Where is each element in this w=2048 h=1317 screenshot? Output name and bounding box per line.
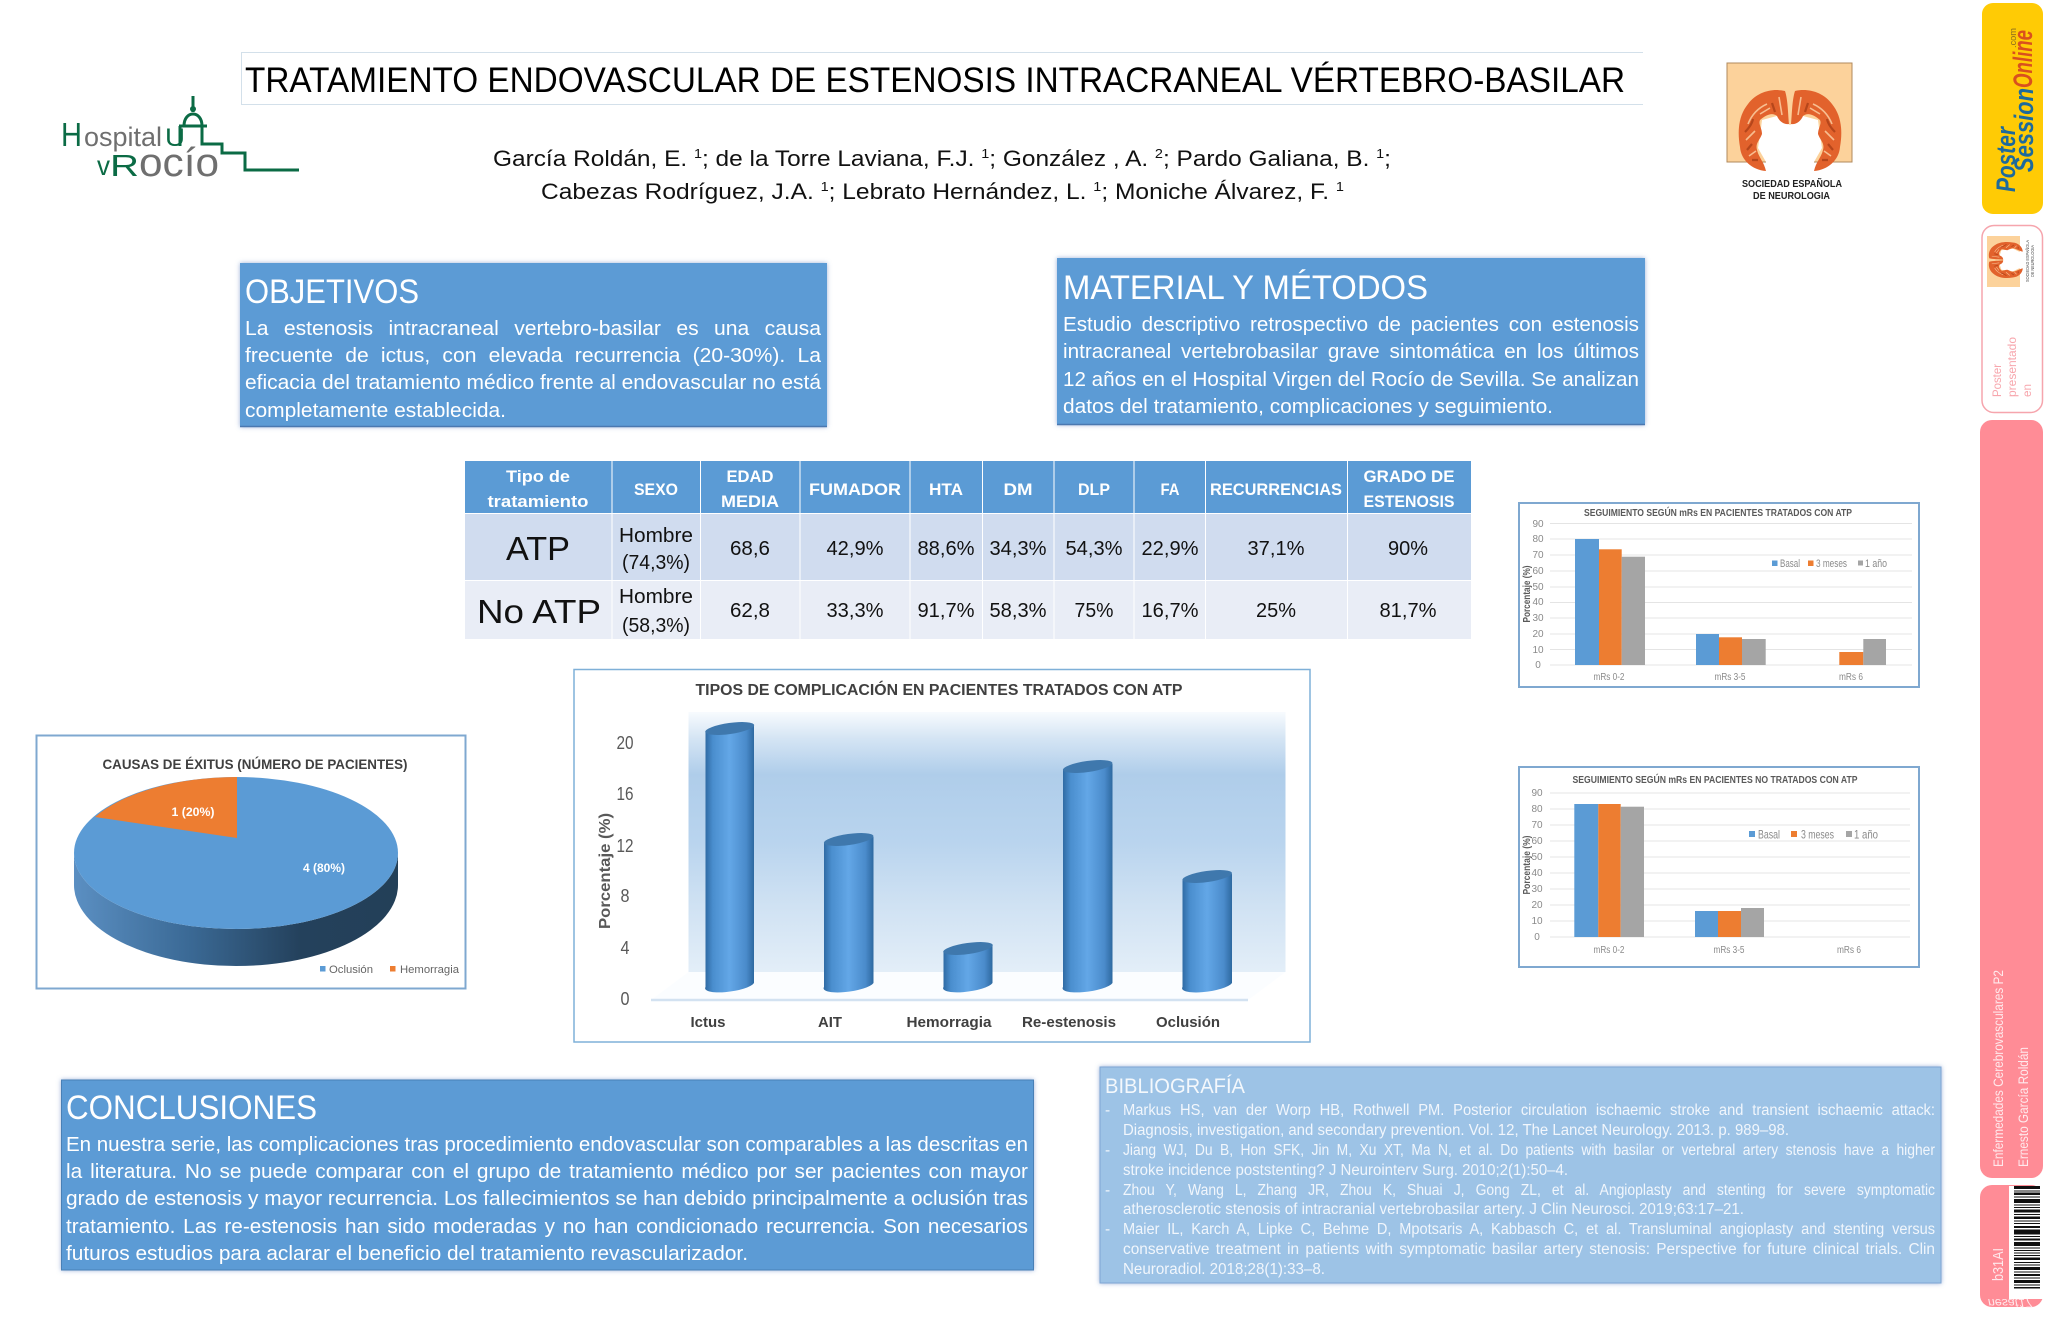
panel: conclusiones: [62, 1080, 1034, 1270]
chart: seguimiento mRs no tratados con ATP: 20: [1531, 900, 1543, 911]
table: características por tipo de tratamiento: No ATP: [477, 593, 601, 630]
sidebar: código y barcode: b31AI: [1990, 1248, 2007, 1281]
bar: Oclusión: [1182, 868, 1233, 992]
logo: Sociedad Española de Neurología: DE NEUROLOGIA: [1753, 190, 1830, 202]
reference 2: Jiang WJ, Du B, Hon SFK, Jin M, Xu XT, Ma N, et al. Do patients with basilar or vertebral artery stenosis have a higher: [1123, 1142, 1935, 1159]
table: características por tipo de tratamiento: 81,7%: [1380, 600, 1437, 622]
chart: tipos de complicación (cylinders): 16: [616, 784, 634, 804]
table: características por tipo de tratamiento: DM: [1004, 481, 1032, 499]
sidebar: Poster Session Online badge: [1982, 3, 2043, 214]
chart: seguimiento mRs tratados con ATP: mRs 0-2: [1594, 672, 1625, 683]
chart: seguimiento mRs tratados con ATP: 40: [1532, 597, 1544, 608]
logo: Hospital Universitario Virgen del Rocío: R: [110, 148, 139, 183]
authors: 1: [1336, 179, 1344, 194]
chart: seguimiento mRs tratados con ATP: Porcentaje (%): [1522, 566, 1533, 622]
table: características por tipo de tratamiento: [465, 461, 1471, 639]
chart: seguimiento mRs tratados con ATP: mRs 3-5: [1714, 672, 1746, 683]
table: características por tipo de tratamiento: 91,7%: [918, 600, 975, 622]
chart: seguimiento mRs no tratados con ATP: 80: [1531, 804, 1543, 815]
table: características por tipo de tratamiento: 25%: [1256, 600, 1296, 622]
chart: seguimiento mRs tratados con ATP: 10: [1532, 645, 1544, 656]
table: características por tipo de tratamiento: 34,3%: [990, 538, 1047, 560]
table: características por tipo de tratamiento: MEDIA: [721, 493, 779, 511]
authors: 1: [981, 146, 989, 161]
sidebar: Poster Session Online badge: Online: [2008, 30, 2038, 88]
chart: causas de éxitus (pie): [36, 736, 466, 988]
table: características por tipo de tratamiento: SEXO: [634, 481, 678, 499]
authors: 1: [694, 146, 702, 161]
chart: tipos de complicación (cylinders): 8: [620, 886, 630, 906]
table: características por tipo de tratamiento: HTA: [929, 481, 963, 499]
table: características por tipo de tratamiento: ATP: [506, 530, 570, 567]
chart: seguimiento mRs no tratados con ATP: 10: [1531, 916, 1543, 927]
chart: seguimiento mRs tratados con ATP: [1519, 503, 1919, 687]
chart: seguimiento mRs no tratados con ATP: mRs 0-2: [1594, 945, 1625, 956]
chart: tipos de complicación (cylinders): Hemorragia: [906, 1014, 992, 1031]
chart: seguimiento mRs no tratados con ATP: 70: [1531, 820, 1543, 831]
logo: Hospital Universitario Virgen del Rocío: ospital: [84, 122, 162, 152]
authors: García Roldán, E.: [493, 146, 668, 171]
bar: Ictus: [704, 720, 755, 992]
table: características por tipo de tratamiento: 58,3%: [990, 600, 1047, 622]
chart: seguimiento mRs tratados con ATP: Basal: [1780, 558, 1800, 570]
chart: tipos de complicación (cylinders): 20: [616, 733, 634, 753]
authors: [493, 146, 1391, 204]
chart: seguimiento mRs no tratados con ATP: Basal: [1758, 828, 1780, 842]
chart: causas de éxitus (pie): Oclusión: [329, 964, 373, 976]
table: características por tipo de tratamiento: EDAD: [726, 468, 774, 486]
sidebar: código y barcode: [1980, 1185, 2043, 1310]
chart: causas de éxitus (pie): 4 (80%): [303, 861, 345, 875]
table: características por tipo de tratamiento: Hombre: [619, 525, 693, 547]
table: características por tipo de tratamiento: 37,1%: [1248, 538, 1305, 560]
table: características por tipo de tratamiento: RECURRENCIAS: [1210, 481, 1342, 499]
reference 1: -: [1105, 1102, 1110, 1119]
sidebar: poster presentado en: [1982, 226, 2042, 412]
barcode: [2014, 1186, 2040, 1288]
authors: ;: [1384, 146, 1391, 171]
chart: seguimiento mRs tratados con ATP: 70: [1532, 550, 1544, 561]
chart: seguimiento mRs tratados con ATP: 1 año: [1865, 558, 1887, 570]
table: características por tipo de tratamiento: 90%: [1388, 538, 1428, 560]
table: características por tipo de tratamiento: 62,8: [730, 600, 770, 622]
chart: seguimiento mRs no tratados con ATP: 0: [1534, 932, 1540, 943]
authors: ; Moniche Álvarez, F.: [1101, 179, 1336, 204]
chart: causas de éxitus (pie): 1 (20%): [172, 805, 214, 819]
chart: seguimiento mRs no tratados con ATP: 1 año: [1854, 828, 1878, 842]
authors: ; Pardo Galiana, B.: [1163, 146, 1376, 171]
table: características por tipo de tratamiento: 54,3%: [1066, 538, 1123, 560]
panel: bibliografía: [1100, 1067, 1941, 1283]
panel: objetivos: eficacia del tratamiento médico frente al endovascular no está: [245, 372, 822, 394]
chart: seguimiento mRs tratados con ATP: 60: [1532, 566, 1544, 577]
table: características por tipo de tratamiento: 88,6%: [918, 538, 975, 560]
chart: tipos de complicación (cylinders): Oclusión: [1156, 1014, 1220, 1031]
table: características por tipo de tratamiento: GRADO DE: [1364, 468, 1454, 486]
authors: 1: [1376, 146, 1384, 161]
sidebar: categoría y autor: [1980, 420, 2043, 1178]
panel: conclusiones: la literatura. No se puede comparar con el grupo de tratamiento médico por ser pacientes con mayor: [66, 1161, 1028, 1183]
sidebar: poster presentado en: SOCIEDAD ESPAÑOLA: [2024, 240, 2030, 282]
sidebar: poster presentado en: en: [2020, 384, 2034, 397]
chart: seguimiento mRs tratados con ATP: 20: [1532, 629, 1544, 640]
sidebar: Poster Session Online badge: .com: [2008, 28, 2018, 48]
chart: tipos de complicación (cylinders): [574, 670, 1310, 1042]
chart: seguimiento mRs tratados con ATP: 0: [1535, 660, 1541, 671]
reference 2: stroke incidence poststenting? J Neurointerv Surg. 2010;2(1):50–4.: [1123, 1162, 1568, 1179]
chart: causas de éxitus (pie): CAUSAS DE ÉXITUS (NÚMERO DE PACIENTES): [102, 755, 408, 772]
chart: seguimiento mRs no tratados con ATP: 30: [1531, 884, 1543, 895]
chart: tipos de complicación (cylinders): AIT: [818, 1014, 842, 1031]
logo: Sociedad Española de Neurología: [1727, 63, 1852, 202]
reference 4: [1105, 1221, 1935, 1278]
reference 1: [1105, 1102, 1935, 1139]
chart: seguimiento mRs no tratados con ATP: mRs 6: [1837, 945, 1861, 956]
logo: Sociedad Española de Neurología: SOCIEDAD ESPAÑOLA: [1742, 177, 1842, 190]
reference 3: [1105, 1182, 1935, 1218]
logo: Hospital Universitario Virgen del Rocío: ocío: [139, 141, 219, 185]
panel: objetivos: OBJETIVOS: [245, 273, 419, 311]
table: características por tipo de tratamiento: ESTENOSIS: [1364, 493, 1454, 511]
logo: Hospital Universitario Virgen del Rocío: v: [97, 150, 110, 181]
chart: seguimiento mRs no tratados con ATP: 3 meses: [1801, 828, 1834, 842]
reference 1: Markus HS, van der Worp HB, Rothwell PM. Posterior circulation ischaemic stroke and transient ischaemic attack:: [1123, 1102, 1935, 1119]
reference 3: Zhou Y, Wang L, Zhang JR, Zhou K, Shuai J, Gong ZL, et al. Angioplasty and stenting for severe symptomatic: [1123, 1182, 1935, 1199]
table: características por tipo de tratamiento: tratamiento: [488, 493, 588, 511]
authors: Cabezas Rodríguez, J.A.: [541, 179, 786, 204]
chart: tipos de complicación (cylinders): 12: [616, 836, 634, 856]
chart: seguimiento mRs no tratados con ATP: SEGUIMIENTO SEGÚN mRs EN PACIENTES NO TRATADOS CON ATP: [1572, 773, 1858, 786]
reference 2: -: [1105, 1142, 1110, 1159]
table: características por tipo de tratamiento: FUMADOR: [809, 481, 901, 499]
panel: objetivos: completamente establecida.: [245, 400, 506, 422]
chart: seguimiento mRs no tratados con ATP: 50: [1531, 852, 1543, 863]
chart: tipos de complicación (cylinders): TIPOS DE COMPLICACIÓN EN PACIENTES TRATADOS CON ATP: [696, 680, 1183, 699]
chart: seguimiento mRs no tratados con ATP: 40: [1531, 868, 1543, 879]
chart: tipos de complicación (cylinders): Porcentaje (%): [597, 813, 614, 929]
panel: conclusiones: En nuestra serie, las complicaciones tras procedimiento endovascular son comparables a las descritas en: [66, 1134, 1028, 1156]
chart: tipos de complicación (cylinders): Re-estenosis: [1022, 1014, 1116, 1031]
table: características por tipo de tratamiento: (74,3%): [622, 552, 690, 574]
panel: conclusiones: grado de estenosis y mayor recurrencia. Los fallecimientos se han debido principalmente a oclusión tras: [66, 1188, 1028, 1210]
chart: tipos de complicación (cylinders): 4: [620, 938, 630, 958]
table: características por tipo de tratamiento: Hombre: [619, 586, 693, 608]
panel: material y métodos: [1057, 258, 1645, 425]
reference 3: atherosclerotic stenosis of intracranial vertebrobasilar artery. J Clin Neurosci. 2019;63:17–21.: [1123, 1201, 1744, 1218]
authors: ; Lebrato Hernández, L.: [829, 179, 1093, 204]
panel: material y métodos: datos del tratamiento, complicaciones y seguimiento.: [1063, 396, 1553, 418]
bar: AIT: [823, 831, 874, 992]
reference 4: Maier IL, Karch A, Lipke C, Behme D, Mpotsaris A, Kabbasch C, et al. Transluminal angioplasty and stenting versus: [1123, 1221, 1935, 1238]
chart: tipos de complicación (cylinders): Ictus: [690, 1014, 726, 1031]
panel: material y métodos: intracraneal vertebrobasilar grave sintomática en los últimos: [1063, 341, 1639, 363]
panel: bibliografía: BIBLIOGRAFÍA: [1105, 1075, 1245, 1098]
authors: 1: [821, 179, 829, 194]
panel: conclusiones: tratamiento. Las re-estenosis han sido moderadas y no han condicionado recurrencia. Son necesarios: [66, 1216, 1028, 1238]
logo: Hospital Universitario Virgen del Rocío: H: [61, 116, 82, 153]
chart: seguimiento mRs tratados con ATP: 50: [1532, 582, 1544, 593]
logo: Hospital Universitario Virgen del Rocío: [61, 96, 299, 185]
authors: 1: [1093, 179, 1101, 194]
panel: material y métodos: Estudio descriptivo retrospectivo de pacientes con estenosis: [1063, 314, 1639, 336]
table: características por tipo de tratamiento: 42,9%: [826, 538, 884, 560]
panel: objetivos: [240, 263, 827, 427]
reference 4: -: [1105, 1221, 1110, 1238]
table: características por tipo de tratamiento: Tipo de: [506, 468, 570, 486]
panel: material y métodos: 12 años en el Hospital Virgen del Rocío de Sevilla. Se analizan: [1063, 369, 1639, 391]
sidebar: categoría y autor: Ernesto García Roldán: [2016, 1047, 2031, 1167]
chart: seguimiento mRs no tratados con ATP: 60: [1531, 836, 1543, 847]
reference 4: conservative treatment in patients with symptomatic basilar artery stenosis: Perspective for future clinical trials. Clin: [1123, 1241, 1935, 1258]
chart: seguimiento mRs tratados con ATP: 30: [1532, 613, 1544, 624]
logo: Hospital Universitario Virgen del Rocío: U: [165, 124, 185, 152]
sidebar: poster presentado en: Poster: [1990, 364, 2004, 397]
sidebar: categoría y autor: Enfermedades Cerebrovasculares P2: [1991, 970, 2006, 1167]
panel: conclusiones: futuros estudios para aclarar el beneficio del tratamiento revascularizador.: [66, 1243, 748, 1265]
chart: seguimiento mRs no tratados con ATP: [1519, 767, 1919, 967]
sidebar: poster presentado en: presentado: [2005, 337, 2019, 397]
reference 3: -: [1105, 1182, 1110, 1199]
chart: seguimiento mRs tratados con ATP: 80: [1532, 534, 1544, 545]
bar: Re-estenosis: [1062, 758, 1113, 992]
table: características por tipo de tratamiento: DLP: [1078, 481, 1110, 499]
authors: 2: [1155, 146, 1163, 161]
panel: objetivos: frecuente de ictus, con elevada recurrencia (20-30%). La: [245, 345, 822, 367]
sidebar: poster presentado en: DE NEUROLOGIA: [2030, 245, 2035, 277]
table: características por tipo de tratamiento: 16,7%: [1142, 600, 1199, 622]
chart: seguimiento mRs tratados con ATP: 3 meses: [1816, 558, 1847, 570]
reference 4: Neuroradiol. 2018;28(1):33–8.: [1123, 1261, 1325, 1278]
title: TRATAMIENTO ENDOVASCULAR DE ESTENOSIS INTRACRANEAL VÉRTEBRO-BASILAR: [245, 61, 1625, 100]
panel: conclusiones: CONCLUSIONES: [66, 1089, 317, 1127]
bar: Hemorragia: [942, 940, 994, 992]
reference 2: [1105, 1142, 1935, 1179]
chart: seguimiento mRs tratados con ATP: mRs 6: [1839, 672, 1863, 683]
sidebar: Poster Session Online badge: Poster: [1991, 126, 2021, 192]
chart: seguimiento mRs tratados con ATP: SEGUIMIENTO SEGÚN mRs EN PACIENTES TRATADOS CON ATP: [1584, 506, 1852, 519]
chart: seguimiento mRs no tratados con ATP: Porcentaje (%): [1522, 836, 1533, 894]
chart: tipos de complicación (cylinders): 0: [620, 989, 630, 1009]
panel: material y métodos: MATERIAL Y MÉTODOS: [1063, 269, 1428, 307]
table: características por tipo de tratamiento: 75%: [1074, 600, 1114, 622]
table: características por tipo de tratamiento: 22,9%: [1142, 538, 1199, 560]
chart: seguimiento mRs tratados con ATP: 90: [1532, 519, 1544, 530]
sidebar: Poster Session Online badge: Session: [2009, 88, 2039, 172]
table: características por tipo de tratamiento: (58,3%): [622, 615, 690, 637]
reference 1: Diagnosis, investigation, and secondary prevention. Vol. 12, The Lancet Neurology. 2013. p. 989–98.: [1123, 1122, 1789, 1139]
chart: seguimiento mRs no tratados con ATP: 90: [1531, 788, 1543, 799]
authors: ; González , A.: [989, 146, 1155, 171]
table: características por tipo de tratamiento: 68,6: [730, 538, 770, 560]
table: características por tipo de tratamiento: 33,3%: [826, 600, 884, 622]
chart: seguimiento mRs no tratados con ATP: mRs 3-5: [1714, 945, 1745, 956]
authors: ; de la Torre Laviana, F.J.: [702, 146, 981, 171]
sidebar: código y barcode: nesat17: [1988, 1296, 2033, 1310]
table: características por tipo de tratamiento: FA: [1160, 481, 1180, 499]
panel: objetivos: La estenosis intracraneal vertebro-basilar es una causa: [245, 318, 822, 340]
chart: causas de éxitus (pie): Hemorragia: [400, 964, 460, 976]
